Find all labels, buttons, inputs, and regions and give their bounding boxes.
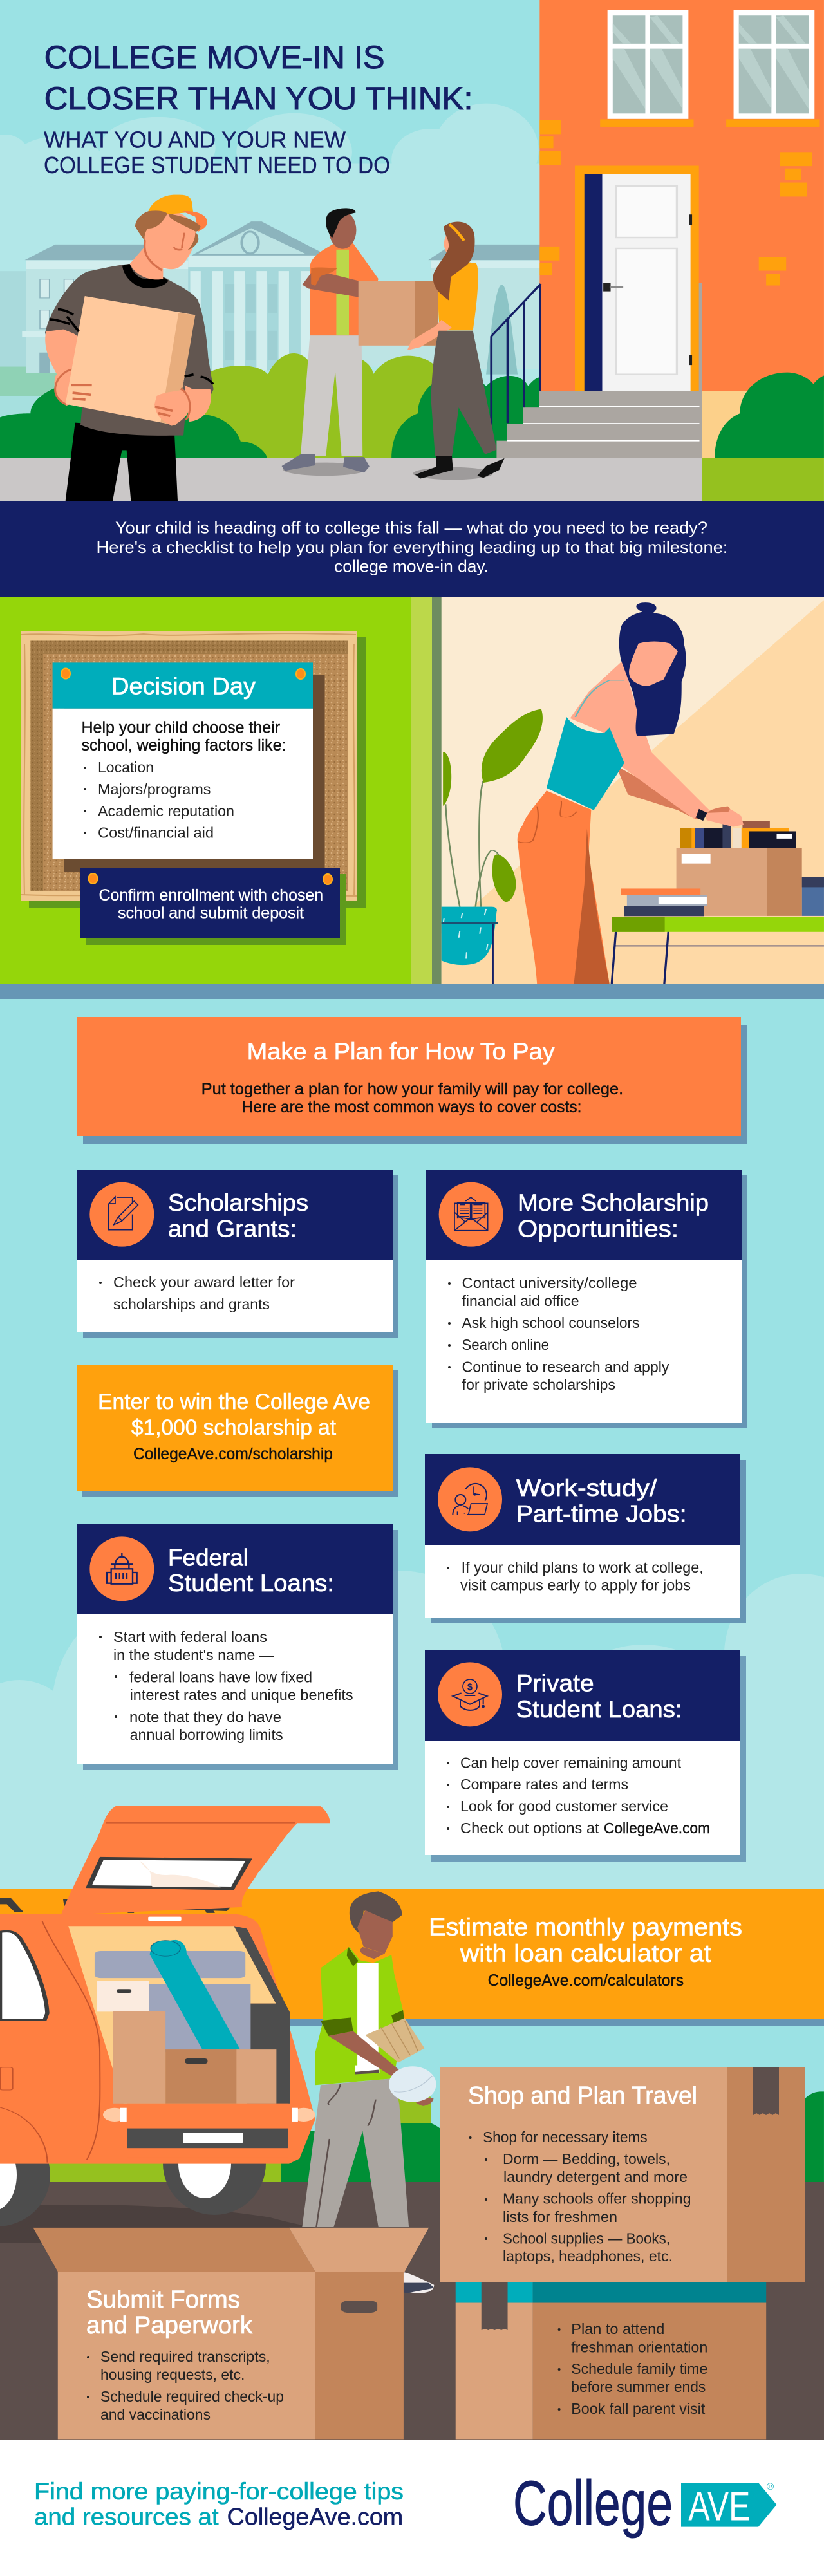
footer text: Find more paying-for-college tips — [34, 2478, 404, 2505]
heading: Student Loans: — [516, 1696, 682, 1722]
heading: Student Loans: — [168, 1570, 334, 1596]
divider band — [0, 984, 824, 999]
callout: win scholarship: Enter to win the College Ave — [98, 1390, 370, 1414]
bullets: lists for freshmen — [503, 2208, 617, 2225]
steps and railing — [491, 284, 702, 458]
bullets: CollegeAve.com — [604, 1820, 710, 1836]
illustration: woman packing books — [442, 597, 824, 984]
heading: Opportunities: — [518, 1216, 679, 1242]
intro band: Here's a checklist to help you plan for everything leading up to that big milestone: — [97, 537, 727, 557]
bullets: interest rates and unique benefits — [130, 1686, 353, 1703]
callout: loan calculator: CollegeAve.com/calculators — [488, 1972, 684, 1990]
door — [575, 166, 702, 391]
table and boxes — [612, 821, 824, 984]
icon: graduation cap and coin — [438, 1662, 502, 1726]
bullets: in the student's name — — [113, 1647, 274, 1663]
bullets: annual borrowing limits — [130, 1726, 283, 1743]
bullets: visit campus early to apply for jobs — [460, 1577, 691, 1594]
heading — [518, 1190, 709, 1242]
icon: clock and laptop — [438, 1467, 502, 1531]
text: factors: Academic reputation — [98, 803, 234, 819]
hero illustration — [0, 0, 824, 503]
bullets: freshman orientation — [571, 2339, 707, 2356]
heading — [516, 1475, 687, 1527]
text: factors: Cost/financial aid — [98, 825, 214, 841]
college building — [0, 221, 541, 423]
footer — [0, 2440, 824, 2576]
text: plan intro: Here are the most common ways to cover costs: — [242, 1098, 582, 1116]
footer text — [34, 2478, 404, 2530]
box: submit forms and paperwork — [33, 2228, 434, 2439]
intro band: college move-in day. — [334, 556, 489, 575]
callout: win scholarship: CollegeAve.com/scholarship — [133, 1445, 333, 1463]
bullets: financial aid office — [462, 1293, 579, 1309]
panel: make a plan — [77, 1017, 747, 1144]
heading: Submit Forms — [86, 2286, 240, 2313]
woman — [518, 602, 744, 984]
bullets: Start with federal loans — [113, 1629, 267, 1645]
bullets — [447, 1754, 710, 1836]
bullets — [558, 2320, 707, 2417]
bullets: housing requests, etc. — [100, 2366, 245, 2383]
plant — [442, 709, 543, 984]
intro band — [0, 501, 824, 597]
bullets: and vaccinations — [100, 2406, 211, 2423]
bullets: Book fall parent visit — [571, 2400, 706, 2417]
icon: pencil on paper — [89, 1182, 154, 1247]
panel: private student loans — [425, 1650, 746, 1862]
heading — [168, 1545, 334, 1596]
subtitle — [44, 127, 390, 178]
heading: Shop and Plan Travel — [468, 2082, 697, 2109]
bullets: note that they do have — [129, 1708, 281, 1725]
bullets: Compare rates and terms — [460, 1776, 628, 1793]
bullets: Search online — [462, 1336, 549, 1353]
bullets: Schedule required check-up — [100, 2388, 284, 2405]
bullets: Plan to attend — [571, 2320, 664, 2337]
bullets: before summer ends — [571, 2378, 706, 2395]
heading: decision day: Decision Day — [111, 673, 256, 699]
subtitle: COLLEGE STUDENT NEED TO DO — [44, 152, 390, 178]
bullets: Send required transcripts, — [100, 2348, 270, 2365]
callout: loan calculator: Estimate monthly payments — [429, 1914, 742, 1941]
heading: Federal — [168, 1545, 248, 1571]
footer text: CollegeAve.com — [227, 2504, 403, 2530]
bullets — [99, 1629, 353, 1743]
bullets: Ask high school counselors — [462, 1314, 640, 1331]
bullets: Contact university/college — [462, 1274, 637, 1291]
text: factors: Help your child choose their — [81, 718, 280, 736]
bullets: laundry detergent and more — [503, 2169, 688, 2185]
heading — [86, 2286, 253, 2339]
tailgate — [61, 1806, 330, 1915]
bullets — [99, 1274, 295, 1312]
bullets: Dorm — Bedding, towels, — [503, 2151, 670, 2167]
bullets: Many schools offer shopping — [503, 2190, 691, 2207]
bullets: Shop for necessary items — [483, 2129, 648, 2145]
icon: graduation cap and coin: $ — [467, 1682, 473, 1692]
bullets — [448, 1274, 670, 1393]
text: factors — [81, 718, 286, 841]
callout: loan calculator: with loan calculator at — [460, 1940, 711, 1967]
house front — [491, 0, 824, 501]
bullets: Can help cover remaining amount — [460, 1754, 682, 1771]
bullets: Continue to research and apply — [462, 1358, 670, 1375]
logo: AVE — [688, 2483, 750, 2530]
bushes — [0, 353, 544, 458]
heading: and Grants: — [168, 1216, 297, 1242]
illustration: man with bedding — [302, 1891, 436, 2227]
icon: capitol building — [89, 1536, 154, 1601]
callout: win scholarship: $1,000 scholarship at — [131, 1415, 337, 1440]
heading: More Scholarship — [518, 1190, 709, 1216]
bullets: federal loans have low fixed — [129, 1668, 312, 1685]
box: shop and plan travel — [440, 2067, 805, 2282]
bullets: School supplies — Books, — [503, 2230, 670, 2246]
callout: loan calculator — [429, 1914, 742, 1990]
bullets: Look for good customer service — [460, 1798, 668, 1815]
man and woman with box — [282, 208, 505, 480]
bullets — [87, 2348, 284, 2423]
text: plan intro — [201, 1080, 623, 1116]
callout: win scholarship — [77, 1365, 398, 1497]
title: CLOSER THAN YOU THINK: — [44, 80, 473, 117]
callout: confirm enrollment — [80, 868, 346, 945]
subtitle: WHAT YOU AND YOUR NEW — [44, 127, 346, 153]
panel: federal student loans — [77, 1524, 398, 1770]
panel: scholarships and grants — [77, 1170, 398, 1338]
panel: more scholarship opportunities — [426, 1170, 747, 1428]
illustration: van — [0, 1806, 330, 2226]
window — [726, 10, 819, 127]
heading — [516, 1670, 682, 1722]
van body — [0, 1914, 315, 2164]
title — [44, 39, 473, 117]
bullets: Check out options at — [460, 1820, 599, 1836]
footer text: and resources at — [34, 2504, 219, 2530]
man holding box — [45, 195, 214, 501]
cork board — [21, 631, 366, 908]
bullets: laptops, headphones, etc. — [503, 2248, 673, 2264]
bullets: for private scholarships — [462, 1376, 615, 1393]
logo: College — [513, 2468, 673, 2539]
pins — [61, 668, 305, 679]
panel: work-study — [425, 1454, 746, 1623]
decision day card — [53, 662, 324, 872]
text: factors: Location — [98, 759, 154, 776]
bullets: scholarships and grants — [113, 1296, 270, 1312]
bullets: Schedule family time — [571, 2360, 707, 2377]
icon: envelope with book — [439, 1182, 503, 1247]
text: plan intro: Put together a plan for how your family will pay for college. — [201, 1080, 623, 1098]
intro band: Your child is heading off to college this fall — what do you need to be ready? — [115, 518, 707, 537]
text: factors: school, weighing factors like: — [81, 736, 286, 754]
heading: Part-time Jobs: — [516, 1501, 687, 1527]
ground — [0, 2086, 824, 2440]
heading — [168, 1190, 308, 1242]
box: final checklist — [456, 2282, 766, 2439]
roof rack — [0, 1898, 231, 1913]
bullets: Check your award letter for — [113, 1274, 295, 1291]
callout: confirm enrollment: school and submit deposit — [118, 904, 304, 922]
bullets — [447, 1559, 704, 1594]
logo: ® — [767, 2481, 774, 2492]
panel: decision day — [0, 597, 442, 984]
bullets: If your child plans to work at college, — [462, 1559, 704, 1576]
callout: confirm enrollment: Confirm enrollment with chosen — [99, 886, 323, 904]
light blue payment background — [0, 999, 824, 1892]
window — [600, 10, 694, 127]
title: COLLEGE MOVE-IN IS — [44, 39, 385, 75]
text: factors: Majors/programs — [98, 781, 211, 798]
bullets — [469, 2129, 691, 2264]
heading: and Paperwork — [86, 2312, 253, 2339]
band: loan calculator backdrop — [0, 1889, 824, 2193]
heading: Work-study/ — [516, 1475, 657, 1501]
heading: Private — [516, 1670, 594, 1697]
heading: make a plan: Make a Plan for How To Pay — [247, 1038, 555, 1065]
heading: Scholarships — [168, 1190, 308, 1216]
